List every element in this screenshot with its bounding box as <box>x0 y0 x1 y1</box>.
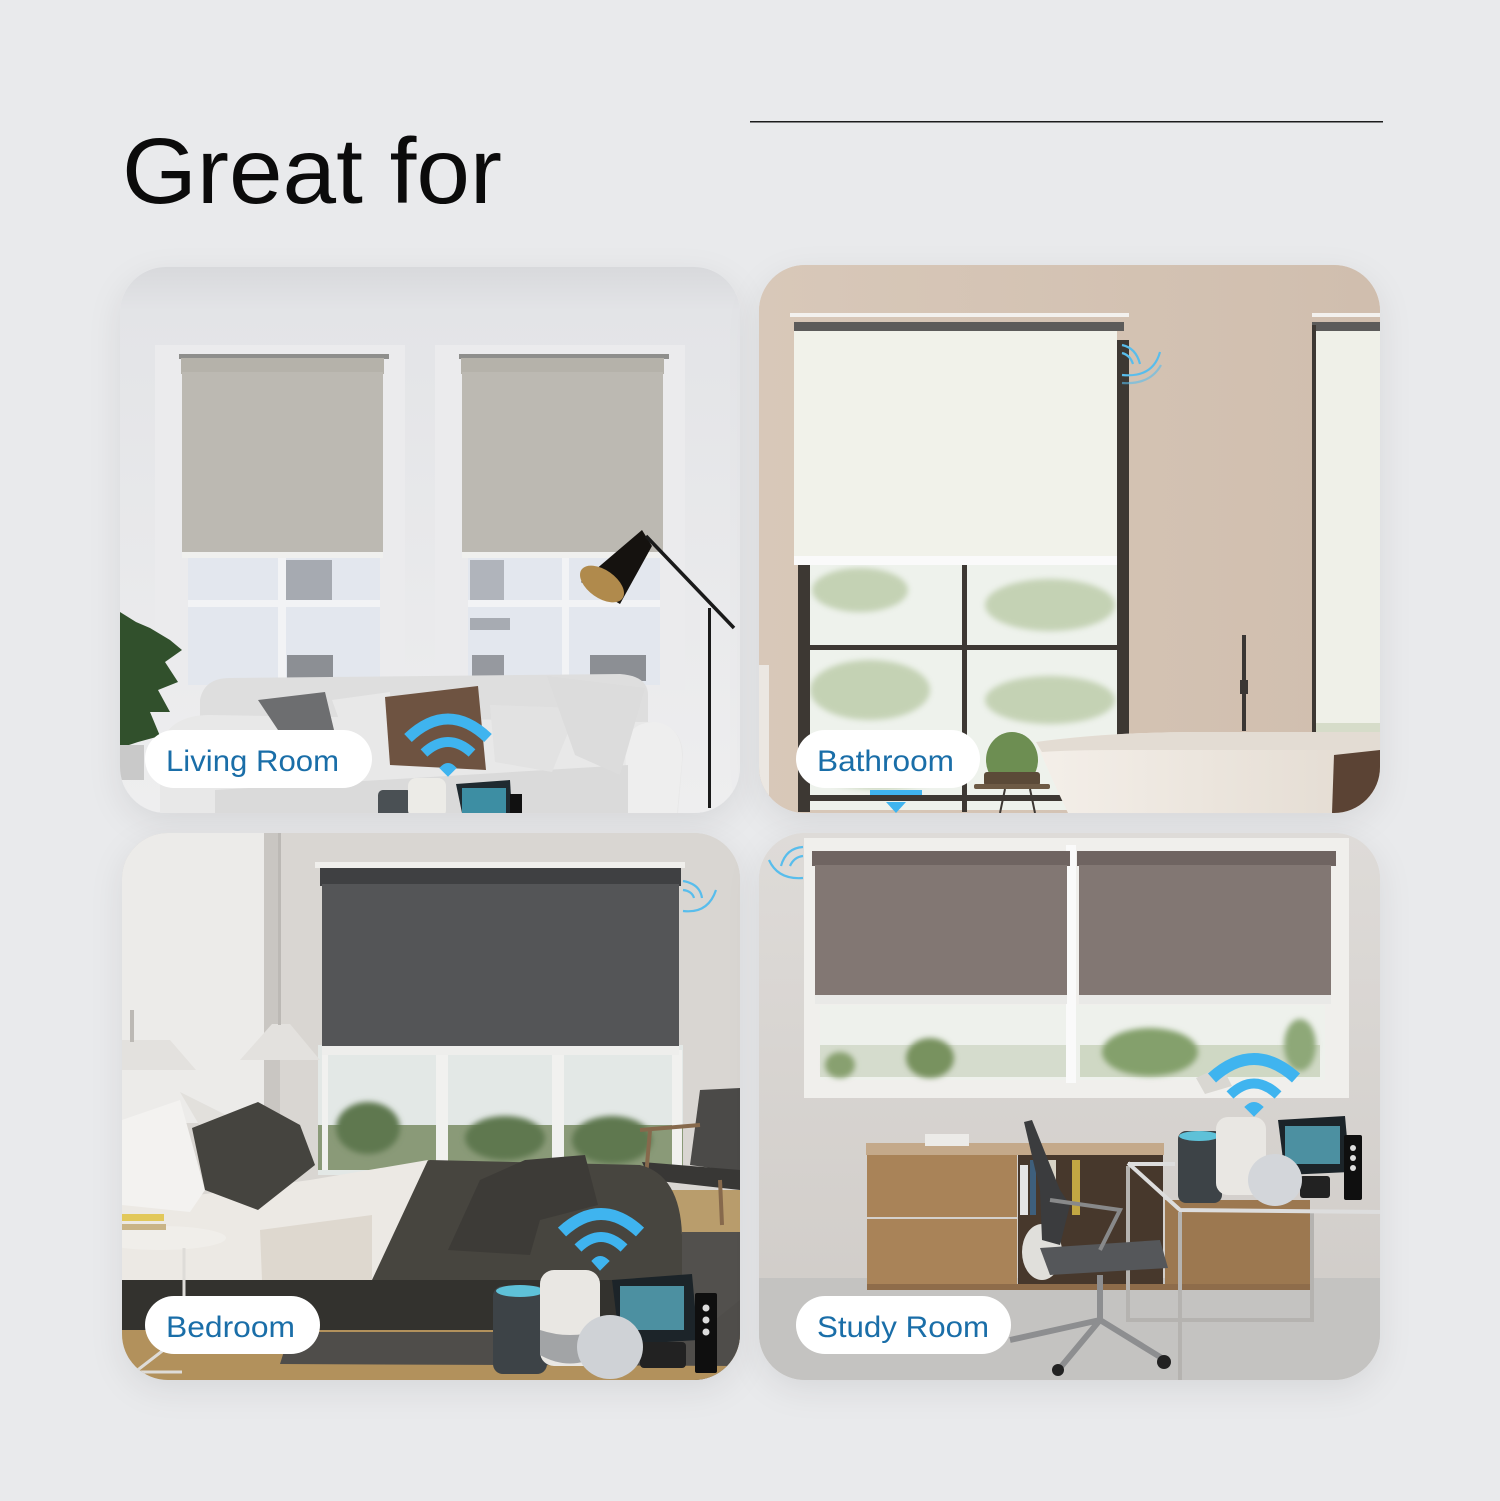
smart devices <box>378 778 522 813</box>
icon: wifi <box>408 719 488 776</box>
label: study room: Study Room <box>817 1311 989 1344</box>
icon: signal waves <box>683 881 716 911</box>
study window <box>804 838 1349 1098</box>
desk chair <box>1010 1120 1171 1376</box>
living room windows <box>286 560 646 681</box>
stool with towels <box>974 772 1050 813</box>
bathroom window <box>759 340 1129 813</box>
study floor <box>759 1278 1380 1380</box>
study blinds <box>812 851 1336 1004</box>
side table with books <box>122 1214 186 1374</box>
title: Great for <box>122 119 502 223</box>
label: bathroom: Bathroom <box>817 745 954 778</box>
living room blinds <box>179 354 669 558</box>
smart devices <box>493 1270 717 1379</box>
bedroom window <box>318 1045 683 1175</box>
armchair <box>640 1088 740 1225</box>
icon: signal waves <box>1122 345 1161 383</box>
icon: wifi <box>870 790 922 813</box>
faucet <box>1240 635 1248 731</box>
label: bedroom <box>145 1296 320 1354</box>
smart devices <box>1178 1066 1362 1206</box>
second window <box>1312 313 1382 735</box>
desk frame <box>1128 1163 1380 1380</box>
panel: bedroom <box>94 833 740 1380</box>
label: living room <box>145 730 372 788</box>
label: bedroom: Bedroom <box>166 1311 295 1344</box>
panel: living room <box>120 267 740 820</box>
desk cabinet <box>866 1134 1310 1290</box>
icon: wifi <box>1212 1059 1296 1116</box>
sofa <box>200 674 648 813</box>
icon: wifi <box>562 1214 640 1270</box>
label: living room: Living Room <box>166 745 339 778</box>
bathtub <box>1036 732 1380 813</box>
lamp <box>573 530 734 808</box>
bed <box>122 1092 682 1330</box>
header rule <box>750 121 1383 122</box>
panel: bathroom <box>759 265 1382 813</box>
label: bathroom <box>796 730 980 788</box>
label: study room <box>796 1296 1011 1354</box>
plant <box>120 612 182 780</box>
bathroom blind <box>790 313 1129 565</box>
pendant lamps <box>122 833 320 1070</box>
icon: signal waves <box>769 847 803 878</box>
panel: study room <box>759 833 1380 1380</box>
bedroom blind <box>315 862 685 1055</box>
floor <box>122 1190 740 1380</box>
